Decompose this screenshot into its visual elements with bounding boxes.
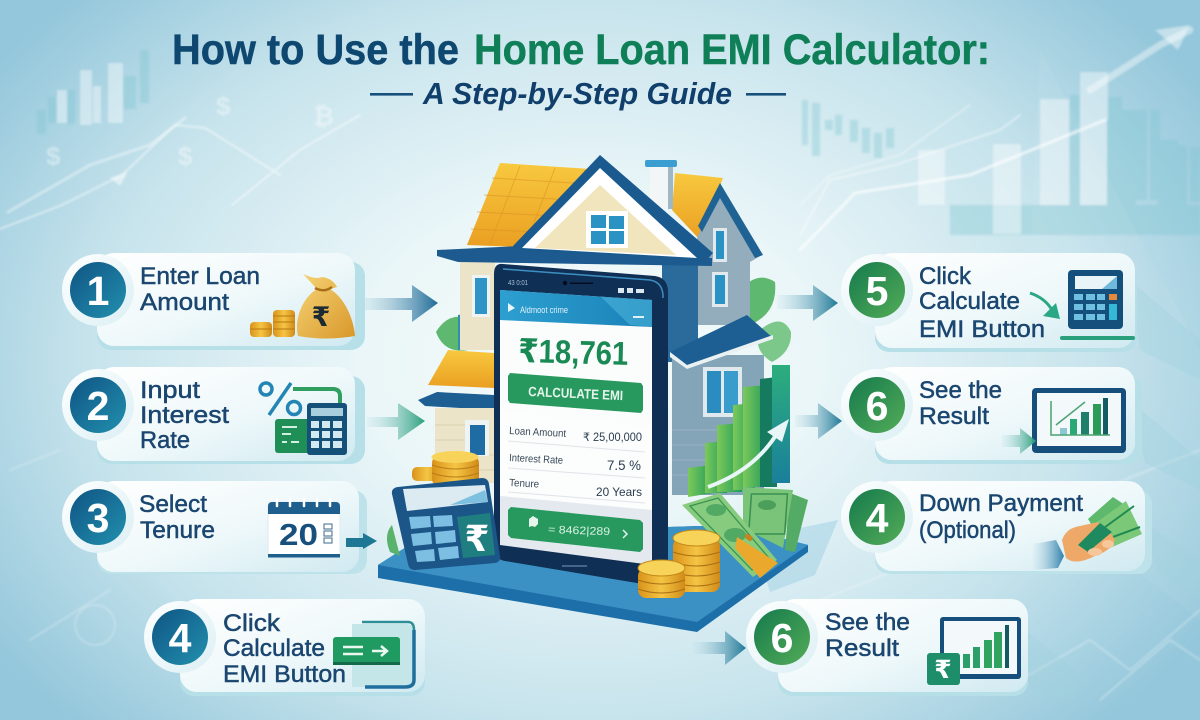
left upper wall [460,262,495,350]
step 5 label: Click [919,263,972,290]
step 6 label [919,377,1002,430]
title highlighted part: Home Loan EMI Calculator: [474,26,990,74]
bottom step 6 label: Result [825,635,899,662]
step 2 card [62,367,365,464]
leaves [436,278,791,362]
down payment card [841,481,1200,600]
step 4 label: Calculate [223,635,325,662]
step 2 label [140,377,229,454]
chimney [645,160,677,209]
subtitle: A Step-by-Step Guide [422,76,732,111]
step 6 card [841,367,1200,490]
step 6 label: See the [919,377,1002,404]
icon: money bag and coins: ₹ [312,302,330,332]
calculator with rupee [387,478,500,570]
lower left roof and wall [428,350,494,388]
step 5 label [919,263,1045,343]
gold coin stacks [638,530,720,598]
loan details [508,425,645,503]
arrow: house to step 6 [795,403,842,439]
icon: hand holding money [1033,497,1142,570]
status bar [508,280,644,293]
step 2 label: Rate [140,427,190,454]
status bar: 43 0:01 [508,280,528,287]
calculate button: CALCULATE EMI [528,384,623,403]
app header: Aldmoot crime [520,305,568,315]
down payment label: (Optional) [919,517,1016,544]
icon: calendar 20: 20 [279,517,318,552]
icon: calendar 20 [268,499,340,558]
EMI amount: ₹18,761 [518,332,629,372]
loan details: Interest Rate [509,452,564,467]
background: $ [178,141,193,171]
loan details: Tenure [509,477,540,491]
background: $ [46,141,61,171]
step 1 card [62,253,365,350]
step 3 label: Select [139,491,207,518]
calculate button [508,373,643,413]
down payment badge: 4 [866,495,889,541]
step 1 label [140,263,260,316]
step 5 badge [849,262,905,318]
step 4 badge [152,609,208,665]
right lower wall [672,355,764,495]
smartphone [494,264,668,586]
icon: percent and calculator [260,383,347,455]
central illustration: house, phone, coins, chart [378,155,838,632]
cash and wallet [682,487,808,578]
bottom step 6 badge: 6 [771,615,793,661]
title first part: How to Use the [172,26,459,74]
bottom action button [508,507,643,552]
step 3 card [62,481,377,574]
coins behind calculator [412,451,479,486]
title [172,26,990,74]
step 1 badge: 1 [87,268,109,314]
step 4 label: Click [223,610,281,637]
loan details: 7.5 % [607,457,641,473]
house [418,155,791,495]
yellow back roofs [467,163,606,247]
arrow: step 1 to house [357,285,438,322]
step 2 label: Interest [140,402,229,429]
arrow: to bottom step 6 [692,631,746,665]
calculator with rupee: ₹ [464,518,490,559]
arrow: step 3 to house [346,533,377,549]
bottom action button: = 8462|289 [548,524,610,538]
loan details: ₹ 25,00,000 [583,432,642,444]
step 1 label: Enter Loan [140,263,260,290]
bottom step 6 card [746,599,1075,700]
step 1 badge [70,262,126,318]
step 3 label [139,491,215,544]
down payment label: Down Payment [919,490,1083,517]
icon: monitor with rupee tile: ₹ [934,656,952,684]
icon: monitor with rupee tile [927,617,1021,685]
step 4 label [223,610,346,688]
blue column [662,262,698,362]
screen [500,290,652,565]
step 6 badge [849,377,905,433]
front gable [513,155,713,262]
arrow: step 2 to house [367,403,425,440]
down payment label [919,490,1083,544]
step 6 label: Result [919,403,989,430]
main eave [437,246,712,266]
step 2 badge: 2 [87,383,109,429]
step 4 label: EMI Button [223,661,346,688]
step 5 card [841,253,1200,380]
step 2 label: Input [140,377,200,404]
right eave [670,315,773,368]
icon: money bag and coins [250,274,355,338]
background: $ [216,91,231,121]
icon: monitor with growth chart [1002,388,1126,454]
loan details: Loan Amount [509,425,566,440]
step 4 badge: 4 [169,615,192,661]
bottom step 6 badge [754,609,810,665]
background: ₿ [313,101,334,131]
arrow: house to step 5 [777,285,838,321]
step 6 badge: 6 [866,383,888,429]
growth arrow [708,419,789,487]
down payment badge [849,489,905,545]
loan details: 20 Years [596,485,642,499]
app header [500,290,652,327]
bottom step 6 label: See the [825,609,910,636]
step 5 badge: 5 [866,268,888,314]
right gable wall [697,187,762,325]
step 3 badge: 3 [87,495,109,541]
bottom step 6 label [825,609,910,662]
platform [378,520,838,632]
step 3 label: Tenure [140,517,215,544]
icon: calculate button [333,622,414,687]
step 4 card [144,599,425,696]
step 5 label: Calculate [919,288,1020,315]
step 2 badge [70,377,126,433]
rising bar chart [688,365,790,497]
step 1 label: Amount [140,289,229,316]
step 5 label: EMI Button [919,316,1045,343]
icon: calculator with arrow [1030,270,1135,340]
step 3 badge [70,489,126,545]
